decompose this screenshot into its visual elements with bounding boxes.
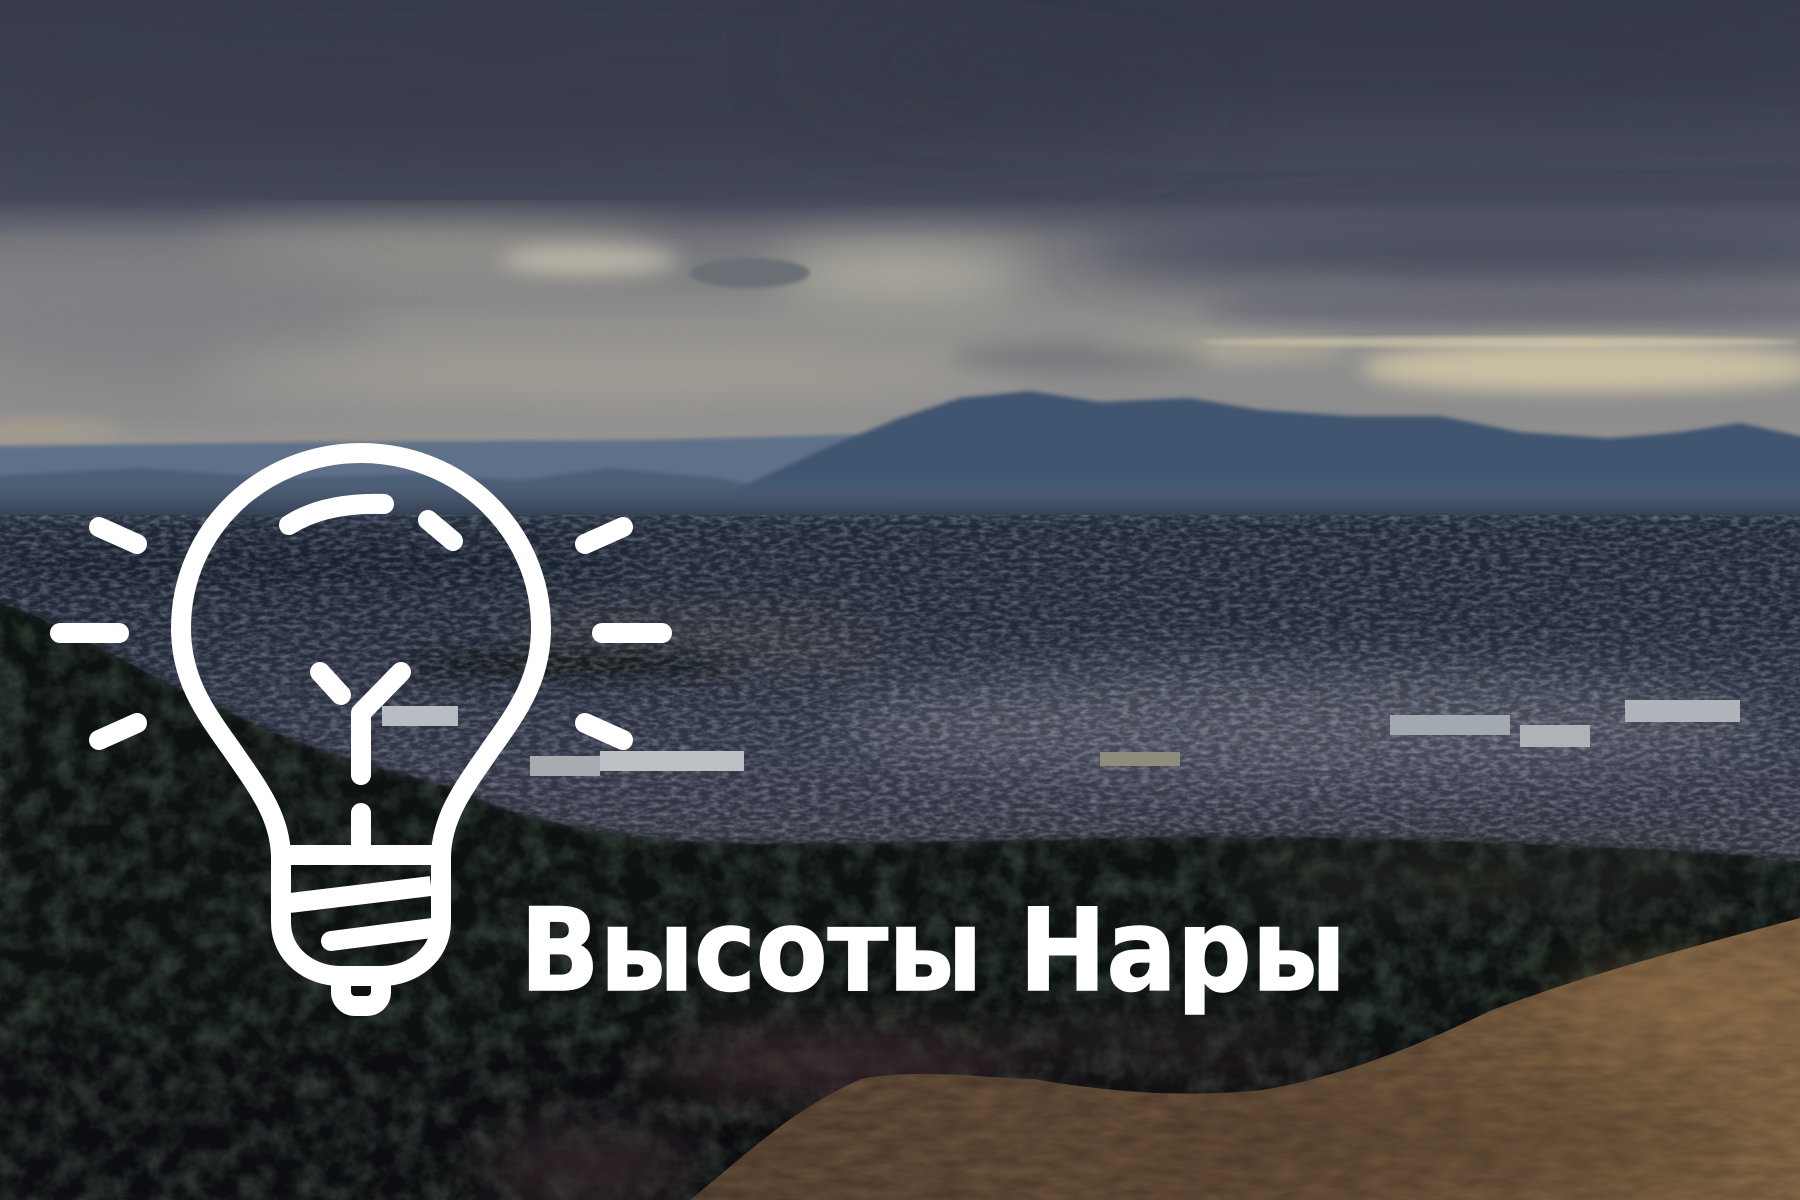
background photo: forested hills — [0, 600, 1800, 1200]
rays right — [585, 527, 662, 740]
background photo: sky with storm clouds — [0, 0, 1800, 520]
base thread 1 — [290, 886, 431, 903]
background photo: distant mountains — [0, 391, 1800, 530]
title: Высоты Нары — [520, 884, 1346, 1017]
background photo: brown grassy hill — [690, 915, 1800, 1200]
bulb glass outline — [181, 453, 541, 856]
glass highlights — [289, 504, 453, 541]
base thread 2 — [331, 928, 432, 941]
base contact — [341, 978, 381, 1006]
background photo: city plain — [0, 478, 1800, 882]
rays left — [60, 527, 137, 740]
bulb base — [281, 855, 441, 976]
icon: light bulb — [60, 453, 662, 1006]
filament — [320, 672, 401, 855]
